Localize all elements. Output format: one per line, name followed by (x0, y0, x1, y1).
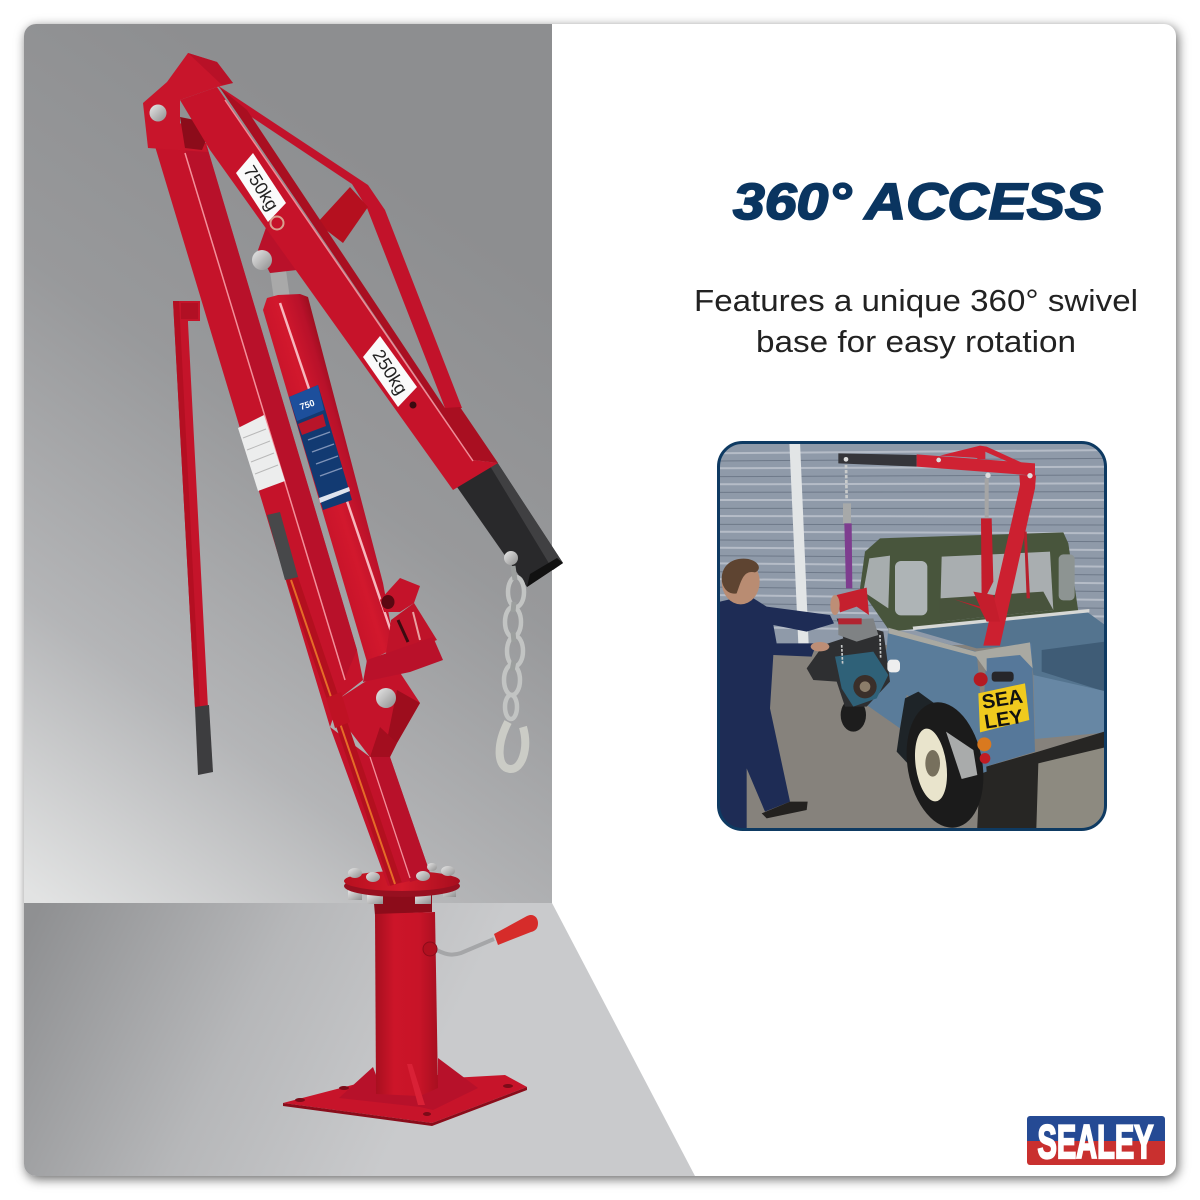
product: engine crane (143, 53, 563, 1126)
truck rear panel (980, 643, 1035, 768)
jib collar highlight (225, 100, 473, 461)
rear lights (974, 672, 1014, 764)
title: 360° ACCESS (733, 173, 1103, 230)
jib beam side face (220, 88, 498, 463)
panel: grey product backdrop (24, 24, 695, 1176)
logo: SEALEY (1027, 1115, 1165, 1168)
number plate: SEA (980, 686, 1024, 714)
hydraulic pump assembly (363, 578, 443, 682)
number plate: LEY (983, 706, 1025, 734)
cab (860, 532, 1078, 632)
rear wheel (840, 704, 866, 732)
capping rail (888, 628, 1033, 672)
logo bottom band (1027, 1141, 1165, 1165)
backdrop floor (24, 903, 695, 1176)
drain pipe (789, 442, 809, 644)
logo top band (1027, 1116, 1165, 1141)
body line 1: Features a unique 360° swivel (694, 283, 1138, 318)
chain hook (500, 722, 525, 769)
chain and purple lifting strap (843, 465, 852, 588)
ram top mount plate (258, 222, 297, 273)
backdrop wall (24, 24, 552, 904)
load label 250kg: 250kg (369, 346, 411, 398)
mast lower section (330, 727, 431, 886)
photo: crane lifting an engine from a pickup (710, 435, 1115, 840)
body text (694, 283, 1138, 359)
mast lower bracket (340, 665, 420, 757)
load label 750kg: 750kg (240, 162, 282, 214)
ground (746, 645, 1100, 828)
truck bed interior (913, 609, 1115, 739)
under body shadow (977, 732, 1104, 828)
engine on sling (807, 588, 900, 707)
bolts on head and ram (150, 104, 284, 270)
handle storage tube (267, 512, 396, 884)
crane cross brace (317, 187, 368, 243)
mast (154, 143, 363, 727)
front-facing wheel (906, 702, 984, 828)
wall cladding (720, 444, 1104, 645)
load label 250kg (363, 336, 417, 407)
flange upper bolts (348, 863, 455, 882)
crane outer strut frame (217, 85, 462, 408)
crane head casting (143, 53, 233, 152)
mechanic (710, 559, 840, 832)
ram instruction label (289, 385, 352, 510)
photo rounded border (718, 442, 1106, 830)
ram instruction label: 750 (299, 398, 316, 412)
black jib extension (457, 462, 563, 587)
mast data sticker (238, 415, 285, 491)
chequer plate (946, 732, 977, 779)
beam hole (410, 402, 416, 408)
base gusset rib (407, 1064, 425, 1105)
base plate and gussets (283, 1058, 527, 1126)
photo contents (720, 444, 1104, 828)
number plate (978, 683, 1029, 734)
tailgate (1036, 748, 1104, 828)
truck side body (867, 628, 987, 775)
hydraulic ram cylinder (263, 271, 395, 662)
demonstration crane (838, 446, 1036, 646)
crane lever handle (173, 301, 213, 775)
lifting chain (500, 551, 525, 769)
lock handle (423, 915, 538, 956)
swivel flange lower (344, 871, 460, 915)
jib beam front face (180, 87, 498, 490)
body line 2: base for easy rotation (756, 324, 1076, 359)
pivot bolt (376, 688, 396, 708)
load label 750kg (236, 153, 286, 222)
base column (375, 912, 438, 1096)
wheel arch (896, 692, 934, 763)
